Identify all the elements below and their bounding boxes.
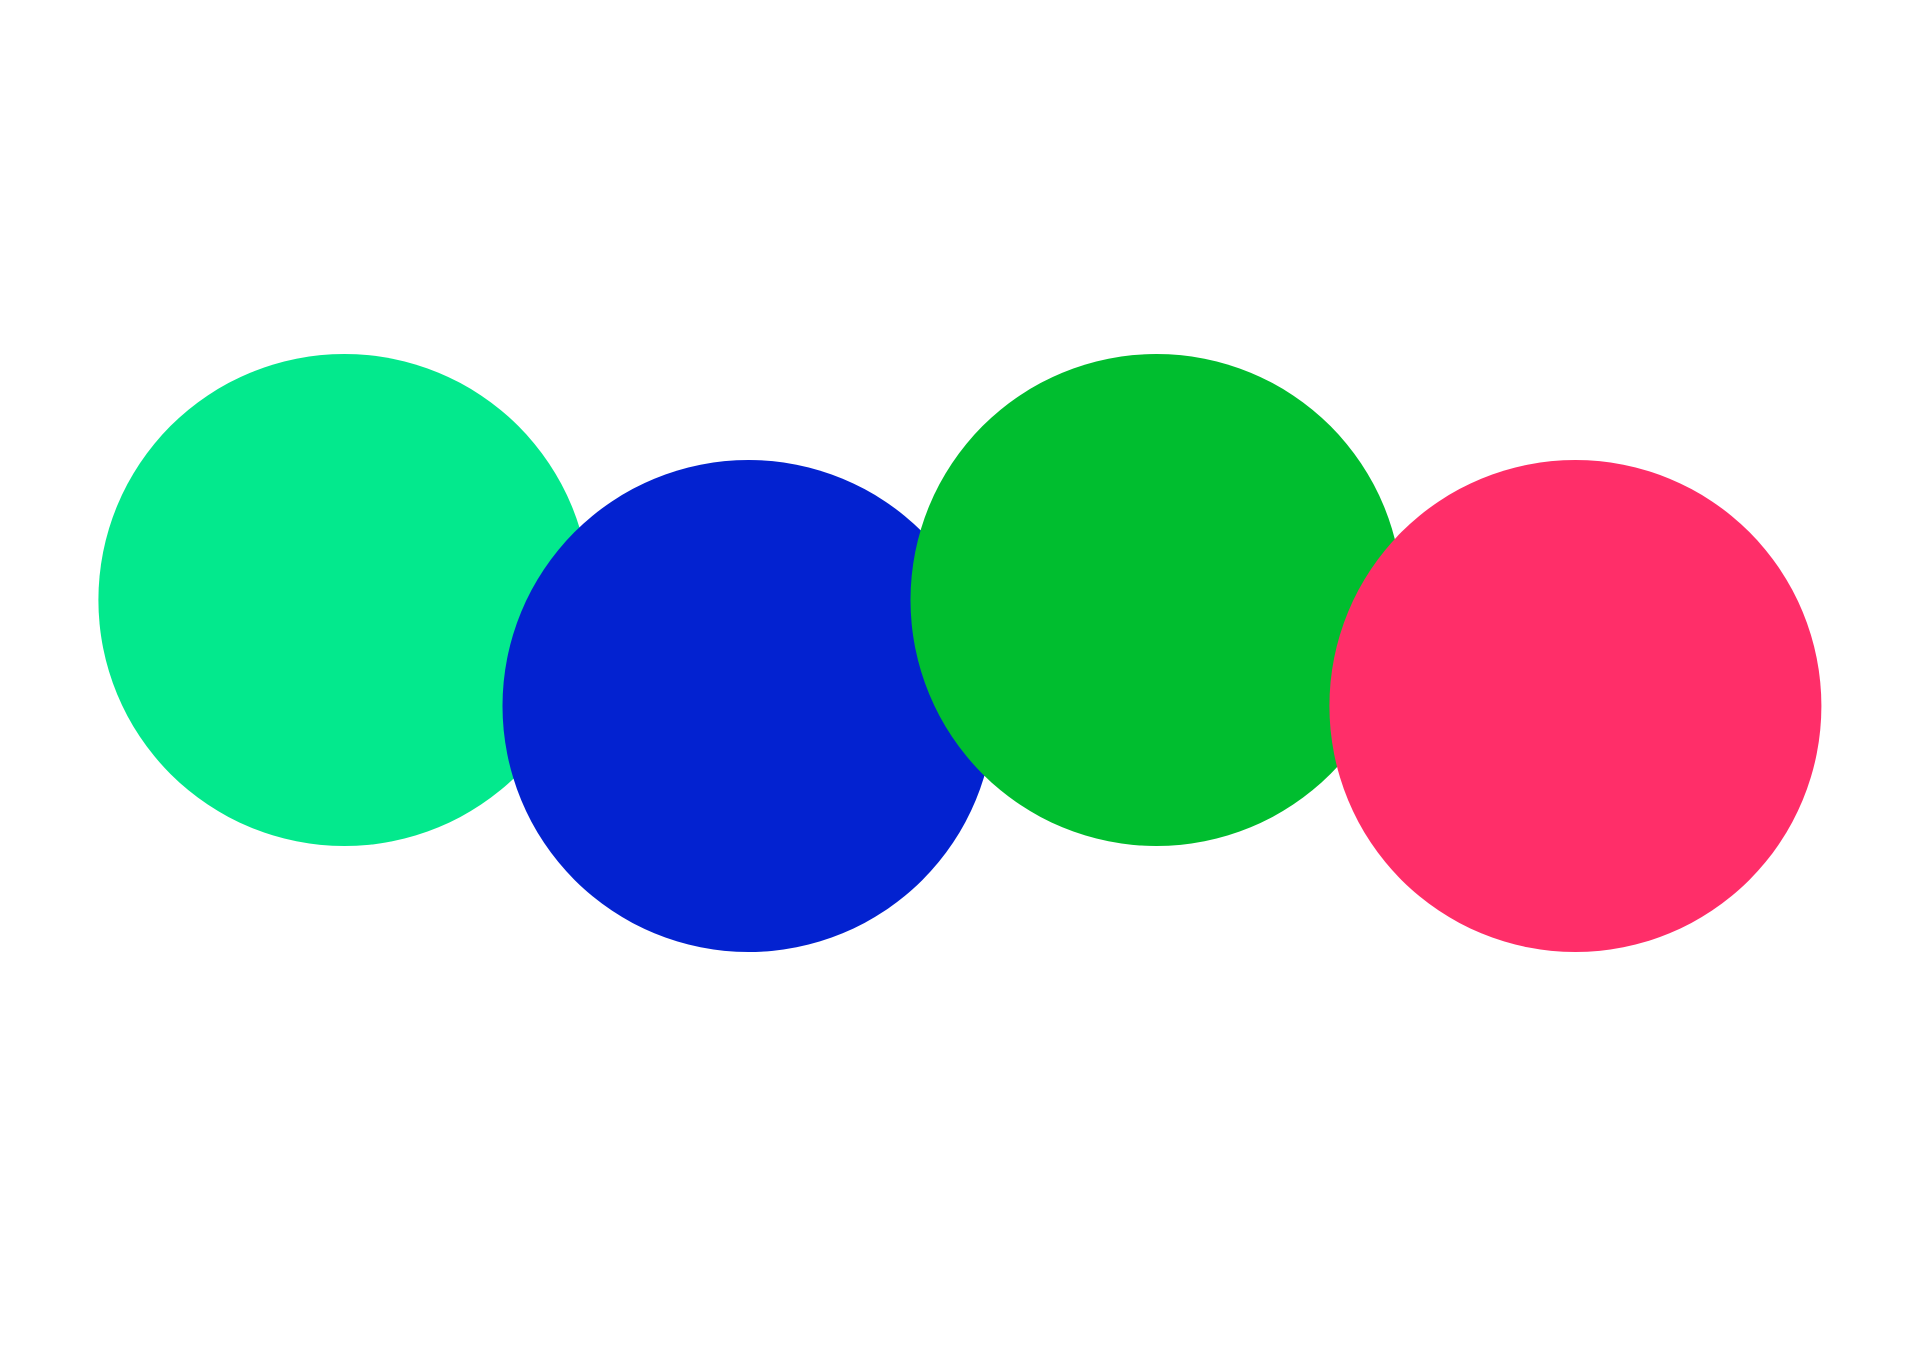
circle 4: pink [1329, 460, 1821, 952]
circle 3: green [910, 354, 1402, 846]
circle 1: mint green [98, 354, 590, 846]
circle 2: blue [502, 460, 994, 952]
